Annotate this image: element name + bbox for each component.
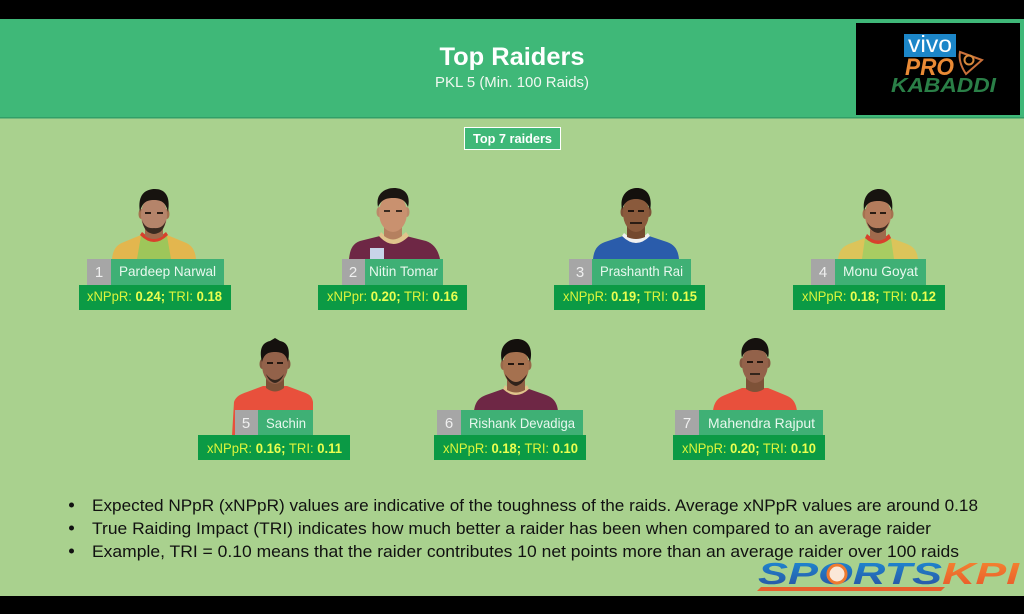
rank 2 [342, 259, 365, 285]
notes: bullet list: Expected NPpR (xNPpR) values are indicative of the toughness of the raids. Average xNPpR values are around 0.18 [92, 497, 978, 515]
logo: SportsKPI: SPORTS [758, 556, 942, 591]
name [461, 410, 583, 435]
name: Sachin [266, 415, 306, 431]
name: Nitin Tomar [369, 263, 438, 279]
portrait 1 [112, 189, 196, 259]
stats [673, 435, 825, 460]
name: Rishank Devadiga [469, 415, 575, 431]
stats [318, 285, 467, 310]
title: Top Raiders [440, 43, 584, 71]
rank 1 [87, 259, 111, 285]
name [699, 410, 823, 435]
header band [0, 19, 1024, 118]
rank 6 [437, 410, 461, 435]
name [258, 410, 313, 435]
portrait 7 [713, 338, 797, 411]
stats: xNPpR: 0.19; TRI: 0.15 [563, 288, 697, 304]
name [111, 259, 224, 285]
logo: vivo Pro Kabaddi: KABADDI [891, 75, 997, 97]
player 7: Mahendra Rajput [673, 338, 825, 460]
stats: xNPpR: 0.24; TRI: 0.18 [87, 288, 222, 304]
logo: SportsKPI: KPI [942, 556, 1021, 591]
logo: vivo Pro Kabaddi: vivo [908, 31, 952, 57]
portrait 5 [232, 338, 313, 436]
logo: vivo Pro Kabaddi [856, 23, 1020, 115]
portrait 4 [838, 189, 918, 259]
player 3: Prashanth Rai [554, 188, 705, 310]
name: Prashanth Rai [600, 263, 683, 279]
rank 3 [569, 259, 592, 285]
rank 5: 5 [242, 415, 250, 432]
body panel [0, 118, 1024, 596]
logo: vivo Pro Kabaddi: PRO [905, 54, 954, 81]
rank 3: 3 [576, 264, 584, 281]
notes: bullet list [69, 497, 978, 561]
section tag: Top 7 raiders [464, 128, 560, 150]
rank 2: 2 [349, 264, 357, 281]
rank 4 [811, 259, 835, 285]
player 2: Nitin Tomar [318, 188, 467, 310]
rank 4: 4 [819, 264, 827, 281]
subtitle: PKL 5 (Min. 100 Raids) [435, 74, 589, 91]
player 4: Monu Goyat [793, 189, 945, 310]
player 5: Sachin [198, 338, 350, 460]
stats [554, 285, 705, 310]
rank 7 [675, 410, 699, 435]
stats: xNPpR: 0.20; TRI: 0.10 [682, 440, 816, 456]
stats: xNPpR: 0.16; TRI: 0.11 [207, 440, 342, 456]
name [365, 259, 443, 285]
name [592, 259, 691, 285]
player 1: Pardeep Narwal [79, 189, 231, 310]
notes: bullet list: Example, TRI = 0.10 means that the raider contributes 10 net points more than an average raider over 100 raids [92, 543, 959, 561]
name: Monu Goyat [843, 263, 918, 279]
rank 6: 6 [445, 415, 453, 432]
player 6: Rishank Devadiga [434, 339, 586, 460]
stats [79, 285, 231, 310]
name [835, 259, 926, 285]
name: Mahendra Rajput [708, 415, 815, 431]
rank 5 [235, 410, 258, 435]
section tag: Top 7 raiders: Top 7 raiders [473, 131, 552, 146]
stats [198, 435, 350, 460]
stats: xNPpR: 0.18; TRI: 0.10 [443, 440, 578, 456]
stats [793, 285, 945, 310]
portrait 2 [349, 188, 440, 259]
stats [434, 435, 586, 460]
stats: xNPpR: 0.18; TRI: 0.12 [802, 288, 936, 304]
stats: xNPpr: 0.20; TRI: 0.16 [327, 288, 458, 304]
logo: SportsKPI [757, 556, 1021, 591]
name: Pardeep Narwal [119, 263, 216, 279]
rank 1: 1 [95, 264, 103, 281]
portrait 6 [474, 339, 558, 411]
rank 7: 7 [683, 415, 691, 432]
portrait 3 [593, 188, 679, 259]
notes: bullet list: True Raiding Impact (TRI) indicates how much better a raider has been when compared to an average raider [92, 520, 932, 538]
